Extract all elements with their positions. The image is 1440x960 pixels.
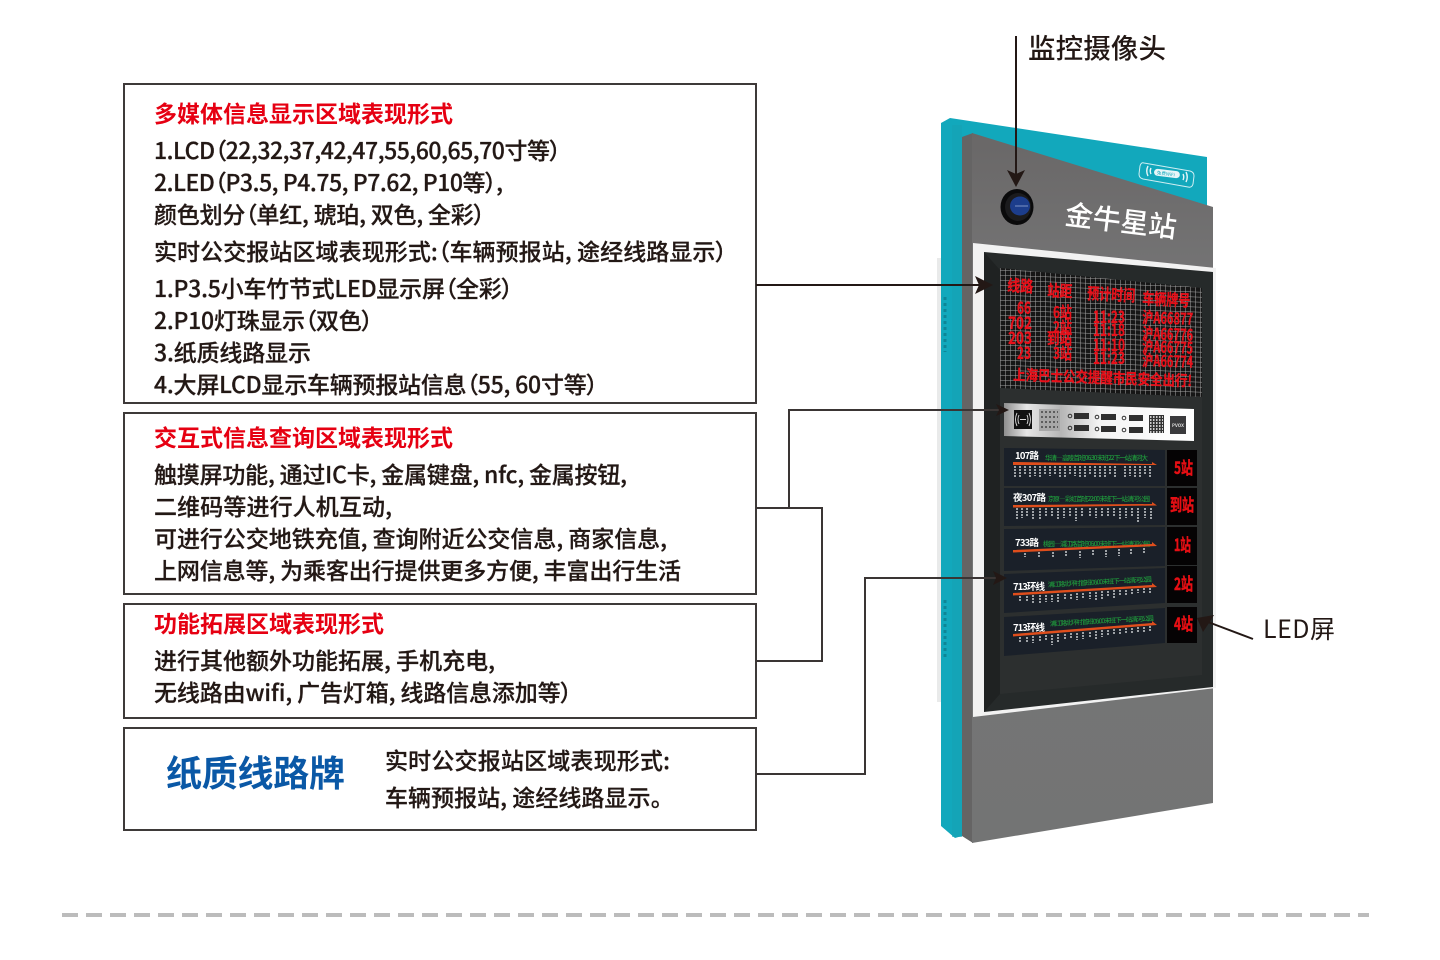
text block: paper route sign — [385, 742, 670, 813]
metal buttons — [1068, 413, 1143, 433]
screen dark housing — [984, 252, 1213, 712]
text block: paper route sign: 实时公交报站区域表现形式: — [385, 742, 670, 776]
connector: multimedia panel to LED display — [756, 276, 993, 294]
LED rows: 沪A66774 — [1142, 347, 1194, 373]
interaction strip — [1004, 403, 1194, 441]
label: LED screen: LED屏 — [1263, 610, 1335, 646]
route row 3: 1站 — [1174, 531, 1191, 556]
arrow: LED screen — [1197, 615, 1253, 639]
route row 2 — [1004, 488, 1197, 526]
LED header: 站距 — [1047, 277, 1073, 302]
LED rows: 沪A66775 — [1142, 333, 1194, 359]
LED header — [1007, 272, 1191, 312]
icon: wifi badge: 免费WiFi — [1157, 169, 1175, 178]
icon: NFC reader — [1014, 410, 1032, 429]
panel: function extension — [124, 604, 756, 718]
LED header: 预计时间 — [1087, 280, 1136, 307]
LED rows: 23 — [1017, 339, 1031, 364]
dashed divider — [62, 913, 1369, 917]
LED rows: 11:23 — [1093, 344, 1125, 369]
text block: multimedia forms: 2.LED（P3.5, P4.75, P7.62, P10等）, — [154, 164, 503, 198]
heading: multimedia: 多媒体信息显示区域表现形式 — [154, 95, 453, 129]
text block: extension: 进行其他额外功能拓展, 手机充电, — [154, 642, 495, 676]
LED rows: 6站 — [1053, 299, 1072, 323]
icon: QR code — [1149, 415, 1164, 433]
LED rows: 到站 — [1047, 325, 1072, 349]
route row 2: 到站 — [1170, 491, 1194, 516]
route row 4: 713环线 — [1013, 579, 1045, 593]
route row 5: 713环线 — [1013, 620, 1045, 634]
LED rows: 11:18 — [1093, 316, 1125, 341]
route row 5 — [1004, 607, 1197, 656]
text block: multimedia forms — [154, 132, 727, 400]
text block: interactive: 二维码等进行人机互动, — [154, 488, 392, 522]
brand plate: PVOX — [1172, 423, 1184, 429]
LED rows: 203 — [1008, 324, 1032, 349]
text block: multimedia forms: 1.P3.5小车竹节式LED显示屏（全彩） — [154, 270, 513, 304]
route row 3: 733路 — [1015, 535, 1039, 549]
LED rows: 3站 — [1053, 340, 1072, 364]
route row 2: 夜307路 — [1013, 490, 1046, 504]
arrow: camera — [1007, 36, 1025, 187]
LED grid display — [1000, 268, 1202, 397]
connector: interactive and extension panels to interaction strip — [756, 404, 1009, 661]
text block: multimedia forms: 1.LCD（22,32,37,42,47,55,60,65,70寸等） — [154, 132, 561, 166]
screen white frame — [973, 243, 1216, 717]
text block: extension: 无线路由wifi, 广告灯箱, 线路信息添加等） — [154, 674, 572, 708]
label: camera: 监控摄像头 — [1028, 26, 1166, 66]
text block: interactive: 上网信息等, 为乘客出行提供更多方便, 丰富出行生活 — [154, 552, 681, 586]
LED rows: 沪A66776 — [1142, 320, 1194, 346]
teal back panel — [941, 118, 1207, 838]
panel: multimedia display forms — [124, 84, 756, 403]
route row 4: 2站 — [1174, 570, 1193, 595]
route row 2: 京原 — 彩虹 首班 22:00 末班 下一站 清河公园 — [1048, 493, 1150, 503]
route row 3: 桃园 — 浦江路 首班 06:00 末班 下一站 清河公园 — [1043, 538, 1150, 548]
LED rows: 702 — [1008, 309, 1032, 334]
panel: interactive query — [124, 413, 756, 594]
panel: paper route sign — [124, 728, 756, 830]
station name: 金牛星站 — [1063, 193, 1179, 247]
heading: paper route sign: 纸质线路牌 — [166, 745, 345, 797]
LED rows: 11:10 — [1093, 331, 1125, 356]
route row 5: 4站 — [1174, 610, 1193, 635]
route row 1 — [1004, 448, 1197, 486]
text block: interactive: 可进行公交地铁充值, 查询附近公交信息, 商家信息, — [154, 520, 667, 554]
route row 3 — [1004, 527, 1197, 571]
route row 1: 华清 — 高陵 首班 06:30 末班 22 下一站 清河大 — [1045, 452, 1148, 462]
LED header: 车辆牌号 — [1142, 285, 1191, 312]
text block: paper route sign: 车辆预报站, 途经线路显示。 — [385, 779, 662, 813]
route row 4: 浦江路北环村 首班 06:00 末班 下一站 清河公园 — [1048, 574, 1152, 589]
LED rows: 2站 — [1053, 314, 1072, 338]
text block: multimedia forms: 4.大屏LCD显示车辆预报站信息（55, 60寸等） — [154, 366, 598, 400]
bus stop kiosk — [937, 118, 1216, 843]
side light strip — [937, 258, 942, 702]
LED rows: 66 — [1017, 294, 1031, 319]
LED scrolling message: 上海巴士公交提醒市民安全出行! — [1013, 364, 1192, 391]
brand plate — [1170, 416, 1186, 434]
icon: wifi badge — [1139, 163, 1194, 187]
text block: multimedia forms: 3.纸质线路显示 — [154, 334, 311, 368]
LED rows — [1008, 294, 1194, 373]
heading: interactive: 交互式信息查询区域表现形式 — [154, 419, 453, 453]
route row 5: 浦江路北环村 首班 06:00 末班 下一站 清河公园 — [1050, 613, 1154, 628]
text block: extension — [154, 642, 572, 708]
text block: multimedia forms: 实时公交报站区域表现形式:（车辆预报站, 途经线路显示） — [154, 233, 727, 267]
heading: extension: 功能拓展区域表现形式 — [154, 605, 384, 639]
metal keypad — [1039, 409, 1060, 431]
LED rows: 11:23 — [1093, 303, 1125, 328]
text block: interactive: 触摸屏功能, 通过IC卡, 金属键盘, nfc, 金属按钮, — [154, 456, 627, 490]
text block: multimedia forms: 颜色划分（单红, 琥珀, 双色, 全彩） — [154, 196, 485, 230]
route row 4 — [1004, 566, 1197, 613]
LED header: 线路 — [1007, 272, 1034, 297]
LED rows: 沪A66877 — [1142, 304, 1194, 330]
icon: camera — [1000, 189, 1034, 225]
stops to go: 5站 — [1174, 454, 1193, 479]
grey side face — [962, 133, 973, 843]
grey front panel — [972, 133, 1213, 843]
route row 1: 107路 — [1015, 448, 1039, 462]
connector: paper sign panel to routes — [756, 571, 1007, 774]
text block: multimedia forms: 2.P10灯珠显示（双色） — [154, 302, 373, 336]
text block: interactive — [154, 456, 681, 586]
